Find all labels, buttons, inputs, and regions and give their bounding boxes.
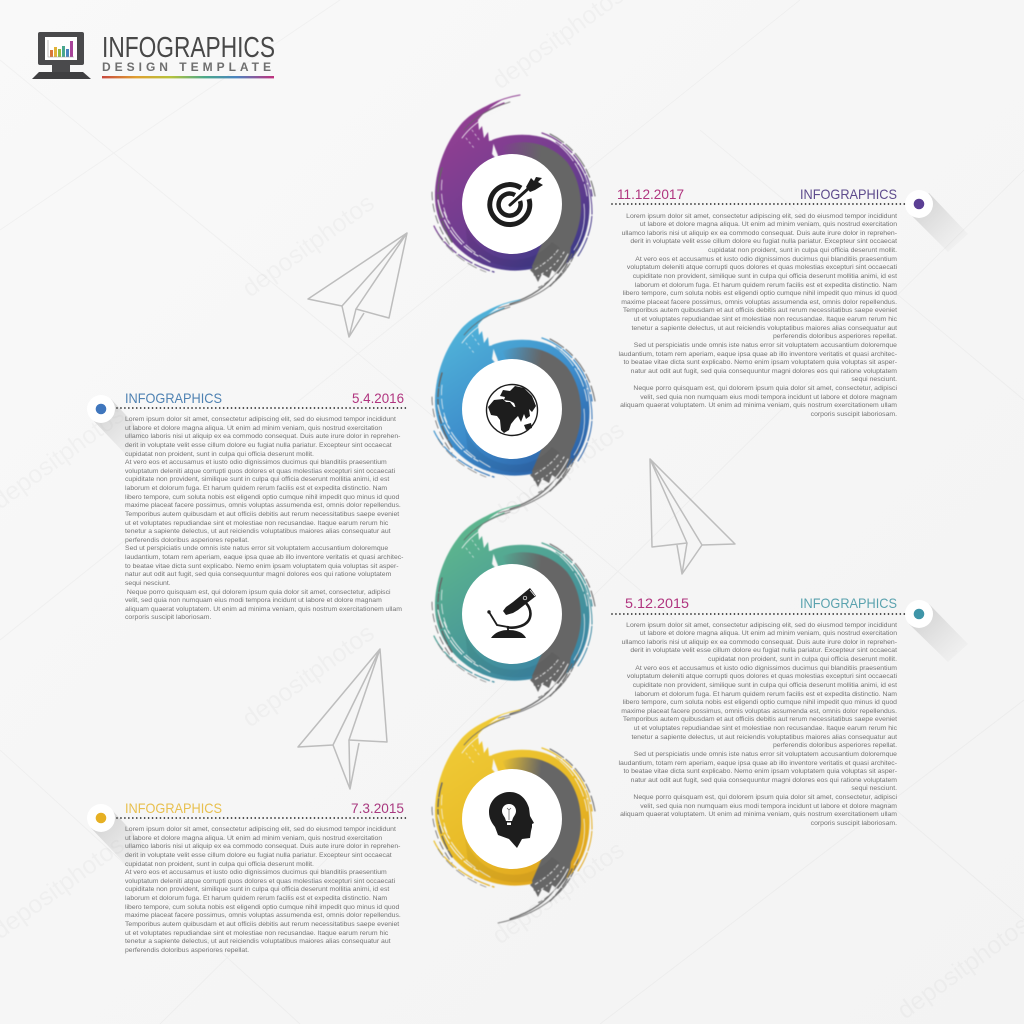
- body text 1: Lorem ipsum dolor sit amet, consectetur adipiscing elit, sed do eiusmod tempor incididunt: [626, 212, 897, 220]
- body text 4: cupiditate non provident, similique sunt in culpa qui officia deserunt mollitia animi, id est: [125, 886, 389, 893]
- body text 1: sequi nesciunt.: [851, 376, 897, 383]
- body text 3: cupiditate non provident, similique sunt in culpa qui officia deserunt mollitia animi, id est: [633, 682, 897, 689]
- white disc 3: [462, 564, 562, 664]
- body text 4: voluptatum deleniti atque corrupti quos dolores et quas molestias excepturi sint occaecati: [125, 878, 395, 885]
- body text 3: Temporibus autem quibusdam et aut officiis debitis aut rerum necessitatibus saepe eveniet: [623, 716, 897, 723]
- body text 2: ut et voluptates repudiandae sint et molestiae non recusandae. Itaque earum rerum hic: [125, 520, 388, 526]
- body text 2: velit, sed quia non numquam eius modi tempora incidunt ut labore et dolore magnam: [125, 597, 382, 604]
- body text 3: Lorem ipsum dolor sit amet, consectetur adipiscing elit, sed do eiusmod tempor incididunt: [626, 622, 897, 628]
- body text 3: [618, 622, 897, 827]
- body text 3: maxime placeat facere possimus, omnis voluptas assumenda est, omnis dolor repellendus.: [621, 708, 897, 715]
- body text 1: ut et voluptates repudiandae sint et molestiae non recusandae. Itaque earum rerum hic: [634, 316, 897, 323]
- body text 1: corporis suscipit laboriosam.: [811, 411, 897, 418]
- pointer marker 2: [87, 395, 150, 459]
- body text 3: voluptatum deleniti atque corrupti quos dolores et quas molestias excepturi sint occaecati: [627, 673, 897, 680]
- watermark text: depositphotos: [487, 836, 629, 950]
- body text 3: velit, sed quia non numquam eius modi tempora incidunt ut labore et dolore magnam: [640, 803, 897, 810]
- swirl step 1: target: [432, 95, 595, 308]
- body text 3: natur aut odit aut fugit, sed quia consequuntur magni dolores eos qui ratione voluptatem: [631, 777, 897, 784]
- body text 2: corporis suscipit laboriosam.: [125, 614, 211, 621]
- body text 4: [125, 826, 401, 954]
- body text 1: maxime placeat facere possimus, omnis voluptas assumenda est, omnis dolor repellendus.: [621, 299, 897, 306]
- date 3: 5.12.2015: [625, 595, 689, 611]
- heading 1: INFOGRAPHICS: [800, 186, 897, 202]
- body text 2: [125, 416, 404, 621]
- body text 2: Temporibus autem quibusdam et aut officiis debitis aut rerum necessitatibus saepe eveniet: [125, 511, 399, 518]
- body text 3: Sed ut perspiciatis unde omnis iste natus error sit voluptatem accusantium doloremque: [634, 751, 897, 758]
- heading 3: INFOGRAPHICS: [800, 595, 897, 611]
- body text 4: ut labore et dolore magna aliqua. Ut enim ad minim veniam, quis nostrud exercitation: [125, 835, 382, 842]
- swirl step 4: head with bulb: [432, 710, 595, 923]
- date 1: 11.12.2017: [617, 186, 684, 202]
- body text 3: libero tempore, cum soluta nobis est eligendi optio cumque nihil impedit quo minus id quod: [623, 699, 897, 706]
- body text 4: maxime placeat facere possimus, omnis voluptas assumenda est, omnis dolor repellendus.: [125, 912, 401, 919]
- title: Infographics design template: DESIGN TEMPLATE: [102, 60, 271, 74]
- body text 4: Temporibus autem quibusdam et aut officiis debitis aut rerum necessitatibus saepe eveniet: [125, 921, 399, 928]
- body text 1: cupiditate non provident, similique sunt in culpa qui officia deserunt mollitia animi, id est: [633, 273, 897, 280]
- body text 2: cupidatat non proident, sunt in culpa qui officia deserunt mollit.: [125, 450, 314, 458]
- body text 3: to beatae vitae dicta sunt explicabo. Nemo enim ipsam voluptatem quia voluptas sit asper-: [623, 768, 897, 775]
- body text 2: derit in voluptate velit esse cillum dolore eu fugiat nulla pariatur. Excepteur sint occaecat: [125, 442, 392, 449]
- icon: target with dart: [490, 177, 543, 225]
- body text 3: ut et voluptates repudiandae sint et molestiae non recusandae. Itaque earum rerum hic: [634, 725, 897, 732]
- body text 2: maxime placeat facere possimus, omnis voluptas assumenda est, omnis dolor repellendus.: [125, 502, 401, 509]
- icon: microscope: [487, 588, 536, 638]
- paper plane top left: [308, 233, 407, 337]
- body text 4: At vero eos et accusamus et iusto odio dignissimos ducimus qui blanditiis praesentium: [125, 869, 387, 876]
- body text 2: libero tempore, cum soluta nobis est eligendi optio cumque nihil impedit quo minus id quod: [125, 494, 399, 501]
- body text 2: laudantium, totam rem aperiam, eaque ipsa quae ab illo inventore veritatis et quasi architec-: [125, 554, 403, 561]
- pointer marker 3: [905, 600, 968, 662]
- heading 4: INFOGRAPHICS: [125, 800, 222, 816]
- icon: head with light bulb: [489, 792, 534, 848]
- body text 1: ullamco laboris nisi ut aliquip ex ea commodo consequat. Duis aute irure dolor in reprehen-: [622, 230, 897, 237]
- dotted leader 2: [117, 407, 408, 409]
- body text 2: perferendis doloribus asperiores repellat.: [125, 537, 249, 544]
- body text 2: sequi nesciunt.: [125, 580, 171, 587]
- swirl step 2: globe: [432, 300, 595, 513]
- watermark text: depositphotos: [237, 189, 379, 303]
- dotted leader 4: [117, 817, 408, 819]
- body text 2: Neque porro quisquam est, qui dolorem ipsum quia dolor sit amet, consectetur, adipisci: [127, 588, 391, 596]
- body text 2: ullamco laboris nisi ut aliquip ex ea commodo consequat. Duis aute irure dolor in reprehen-: [125, 433, 400, 440]
- body text 3: aliquam quaerat voluptatem. Ut enim ad minima veniam, quis nostrum exercitationem ullam: [620, 811, 897, 818]
- body text 3: cupidatat non proident, sunt in culpa qui officia deserunt mollit.: [708, 656, 897, 663]
- body text 1: perferendis doloribus asperiores repellat.: [773, 333, 897, 340]
- body text 2: to beatae vitae dicta sunt explicabo. Nemo enim ipsam voluptatem quia voluptas sit asper-: [125, 563, 399, 570]
- swirl step 3: microscope: [432, 505, 595, 718]
- body text 3: At vero eos et accusamus et iusto odio dignissimos ducimus qui blanditiis praesentium: [635, 665, 897, 672]
- title: Infographics design template: [102, 32, 275, 78]
- heading 2: INFOGRAPHICS: [125, 390, 222, 406]
- icon: computer monitor logo: [32, 32, 91, 79]
- body text 4: derit in voluptate velit esse cillum dolore eu fugiat nulla pariatur. Excepteur sint occaecat: [125, 852, 392, 859]
- body text 3: ut labore et dolore magna aliqua. Ut enim ad minim veniam, quis nostrud exercitation: [640, 630, 897, 637]
- body text 4: tenetur a sapiente delectus, ut aut reiciendis voluptatibus maiores alias consequatur aut: [125, 938, 391, 945]
- body text 1: ut labore et dolore magna aliqua. Ut enim ad minim veniam, quis nostrud exercitation: [640, 221, 897, 228]
- icon: globe: [486, 384, 538, 436]
- body text 4: laborum et dolorum fuga. Et harum quidem rerum facilis est et expedita distinctio. Nam: [125, 895, 387, 902]
- body text 1: tenetur a sapiente delectus, ut aut reiciendis voluptatibus maiores alias consequatur aut: [631, 325, 897, 332]
- watermark text: depositphotos: [237, 619, 379, 733]
- paper plane lower left: [298, 649, 387, 789]
- body text 1: natur aut odit aut fugit, sed quia consequuntur magni dolores eos qui ratione voluptatem: [631, 368, 897, 375]
- body text 2: tenetur a sapiente delectus, ut aut reiciendis voluptatibus maiores alias consequatur aut: [125, 528, 391, 535]
- body text 3: perferendis doloribus asperiores repellat.: [773, 742, 897, 749]
- body text 1: laudantium, totam rem aperiam, eaque ipsa quae ab illo inventore veritatis et quasi architec-: [619, 350, 897, 358]
- body text 2: voluptatum deleniti atque corrupti quos dolores et quas molestias excepturi sint occaecati: [125, 468, 395, 475]
- body text 2: At vero eos et accusamus et iusto odio dignissimos ducimus qui blanditiis praesentium: [125, 459, 387, 466]
- body text 1: Temporibus autem quibusdam et aut officiis debitis aut rerum necessitatibus saepe eveniet: [623, 307, 897, 314]
- date 4: 7.3.2015: [351, 800, 404, 816]
- body text 1: laborum et dolorum fuga. Et harum quidem rerum facilis est et expedita distinctio. Nam: [635, 282, 897, 288]
- body text 3: tenetur a sapiente delectus, ut aut reiciendis voluptatibus maiores alias consequatur aut: [631, 734, 897, 741]
- body text 2: aliquam quaerat voluptatem. Ut enim ad minima veniam, quis nostrum exercitationem ullam: [125, 606, 402, 613]
- body text 1: derit in voluptate velit esse cillum dolore eu fugiat nulla pariatur. Excepteur sint occaecat: [630, 238, 897, 245]
- body text 2: ut labore et dolore magna aliqua. Ut enim ad minim veniam, quis nostrud exercitation: [125, 425, 382, 432]
- date 2: 5.4.2016: [352, 390, 404, 406]
- body text 4: libero tempore, cum soluta nobis est eligendi optio cumque nihil impedit quo minus id quod: [125, 904, 399, 911]
- body text 4: cupidatat non proident, sunt in culpa qui officia deserunt mollit.: [125, 860, 314, 868]
- dotted leader 3: [612, 613, 905, 615]
- dotted leader 1: [612, 203, 905, 205]
- body text 2: laborum et dolorum fuga. Et harum quidem rerum facilis est et expedita distinctio. Nam: [125, 485, 387, 492]
- body text 3: laborum et dolorum fuga. Et harum quidem rerum facilis est et expedita distinctio. Nam: [635, 690, 897, 698]
- body text 1: [618, 212, 897, 418]
- body text 3: ullamco laboris nisi ut aliquip ex ea commodo consequat. Duis aute irure dolor in reprehen-: [622, 639, 897, 646]
- white disc 4: [462, 769, 562, 869]
- body text 1: to beatae vitae dicta sunt explicabo. Nemo enim ipsam voluptatem quia voluptas sit asper-: [623, 359, 897, 366]
- body text 2: cupiditate non provident, similique sunt in culpa qui officia deserunt mollitia animi, id est: [125, 476, 389, 483]
- body text 4: ullamco laboris nisi ut aliquip ex ea commodo consequat. Duis aute irure dolor in reprehen-: [125, 843, 400, 850]
- body text 1: libero tempore, cum soluta nobis est eligendi optio cumque nihil impedit quo minus id quod: [623, 290, 897, 297]
- body text 1: cupidatat non proident, sunt in culpa qui officia deserunt mollit.: [708, 247, 897, 254]
- pointer marker 1: [905, 190, 968, 252]
- body text 3: derit in voluptate velit esse cillum dolore eu fugiat nulla pariatur. Excepteur sint occaecat: [630, 647, 897, 654]
- body text 3: sequi nesciunt.: [851, 785, 897, 792]
- body text 1: aliquam quaerat voluptatem. Ut enim ad minima veniam, quis nostrum exercitationem ullam: [620, 402, 897, 409]
- body text 4: perferendis doloribus asperiores repellat.: [125, 947, 249, 954]
- paper plane middle right: [650, 459, 735, 574]
- body text 1: Sed ut perspiciatis unde omnis iste natus error sit voluptatem accusantium doloremque: [634, 342, 897, 349]
- body text 1: voluptatum deleniti atque corrupti quos dolores et quas molestias excepturi sint occaecati: [627, 264, 897, 271]
- body text 2: Sed ut perspiciatis unde omnis iste natus error sit voluptatem accusantium doloremque: [125, 545, 388, 552]
- pointer marker 4: [87, 804, 150, 869]
- white disc 1: [462, 154, 562, 254]
- body text 1: At vero eos et accusamus et iusto odio dignissimos ducimus qui blanditiis praesentium: [635, 256, 897, 263]
- white disc 2: [462, 359, 562, 459]
- body text 4: Lorem ipsum dolor sit amet, consectetur adipiscing elit, sed do eiusmod tempor incididunt: [125, 826, 396, 833]
- body text 3: laudantium, totam rem aperiam, eaque ipsa quae ab illo inventore veritatis et quasi architec-: [619, 760, 897, 766]
- body text 4: ut et voluptates repudiandae sint et molestiae non recusandae. Itaque earum rerum hic: [125, 930, 388, 936]
- body text 2: natur aut odit aut fugit, sed quia consequuntur magni dolores eos qui ratione voluptatem: [125, 571, 391, 578]
- body text 3: Neque porro quisquam est, qui dolorem ipsum quia dolor sit amet, consectetur, adipisci: [633, 794, 897, 801]
- watermark text: depositphotos: [487, 416, 629, 530]
- title: Infographics design template: INFOGRAPHICS: [102, 32, 275, 64]
- body text 2: Lorem ipsum dolor sit amet, consectetur adipiscing elit, sed do eiusmod tempor incididunt: [125, 416, 396, 423]
- body text 1: velit, sed quia non numquam eius modi tempora incidunt ut labore et dolore magnam: [640, 394, 897, 401]
- body text 3: corporis suscipit laboriosam.: [811, 820, 897, 827]
- body text 1: Neque porro quisquam est, qui dolorem ipsum quia dolor sit amet, consectetur, adipisci: [633, 385, 897, 392]
